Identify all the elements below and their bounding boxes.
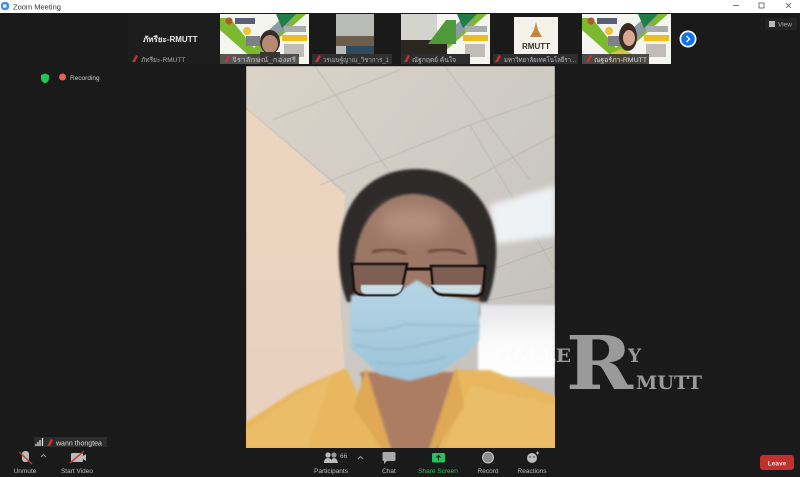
record button: [478, 452, 499, 475]
participants button: Participants: [314, 468, 349, 475]
recording label: Recording: [70, 75, 100, 82]
watermark: [495, 321, 702, 407]
reactions button: Reactions: [518, 468, 547, 475]
thumbnail: name only: ภัทรียะ-RMUTT: [143, 34, 198, 44]
collar: [354, 366, 464, 452]
thumbnail: RMUTT logo: มหาวิทยาลัยเทคโนโลยีรา...: [504, 56, 576, 64]
leave button: [760, 455, 794, 470]
window controls: [733, 3, 791, 8]
window title: Zoom Meeting: [13, 2, 61, 12]
ceiling and wall background: [246, 66, 555, 448]
unmute button: [14, 451, 46, 475]
thumbnail: poster with woman in yellow: ณฐอร์ภา-RMUTT: [594, 56, 647, 64]
view button: View: [778, 22, 792, 28]
face: [354, 194, 480, 316]
start video button: Start Video: [61, 468, 93, 475]
title bar: [0, 0, 800, 13]
security and recording status: [41, 74, 100, 84]
thumbnail: RMUTT logo: [493, 17, 578, 64]
own name tag: [34, 437, 107, 448]
thumbnail: poster with room: [401, 14, 490, 64]
view button: [765, 18, 797, 30]
participants button: [314, 452, 363, 475]
glasses: [352, 264, 485, 296]
icon: next page button: [680, 30, 696, 48]
share screen button: Share Screen: [418, 468, 458, 475]
share screen button: [418, 453, 458, 475]
thumbnail: office camera: [312, 14, 392, 64]
thumbnail: poster with woman: [220, 14, 309, 64]
participants button: 66: [340, 453, 348, 460]
hair: [339, 169, 496, 302]
thumbnail: poster with room: ณัฐกฤตย์ ค้นใจ: [412, 56, 456, 64]
own name tag: wann thongtea: [55, 440, 102, 448]
icon: zoom logo: [1, 2, 9, 10]
watermark: Y: [627, 345, 641, 367]
thumbnail: poster with woman in yellow: [582, 14, 671, 64]
watermark: R: [566, 321, 634, 407]
neck: [360, 372, 460, 452]
ceiling light: [490, 186, 555, 244]
icon: green shield: [41, 74, 49, 84]
leave button: Leave: [768, 460, 787, 468]
thumbnail strip: [128, 14, 696, 64]
thumbnail: office camera: วรเมษฐ์ญาณ_วิชาการ_1: [323, 56, 389, 64]
thumbnail: name only: [128, 14, 219, 64]
shirt: [246, 367, 555, 448]
watermark: MUTT: [636, 372, 702, 394]
chat button: Chat: [382, 468, 396, 475]
unmute button: Unmute: [14, 468, 37, 475]
icon: recording dot: [59, 74, 66, 80]
bright window: [478, 305, 555, 377]
start video button: [61, 451, 93, 475]
record button: Record: [478, 468, 499, 475]
toolbar: [14, 451, 794, 475]
thumbnail: poster with woman: จิราลักษณ์_กองศรี: [232, 56, 297, 64]
face mask: [350, 280, 480, 381]
thumbnail: RMUTT logo: RMUTT: [522, 42, 550, 51]
reactions button: [518, 452, 547, 475]
eyebrows: [372, 249, 466, 254]
chat button: [382, 452, 396, 475]
thumbnail: name only: ภัทรียะ-RMUTT: [141, 56, 185, 64]
watermark: GALLE: [495, 345, 571, 367]
main video: participant photo: [240, 66, 560, 456]
